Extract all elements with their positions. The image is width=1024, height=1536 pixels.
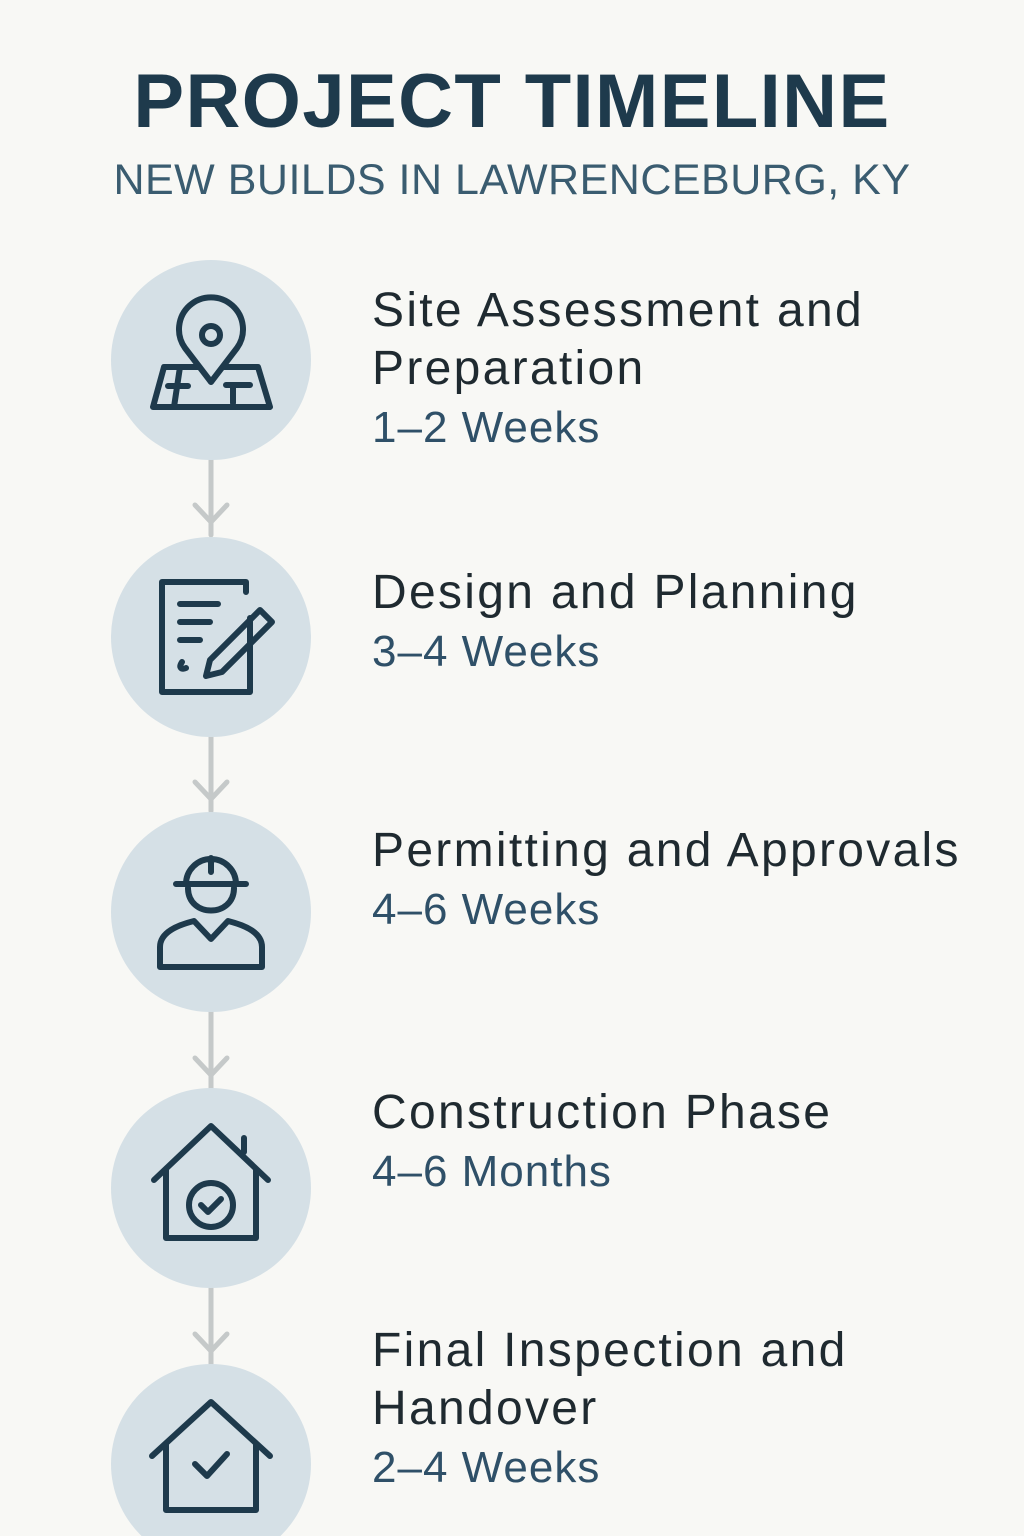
icon: map pin	[153, 297, 270, 407]
icon: house check 1	[154, 1126, 268, 1238]
step 4: Construction Phase	[372, 1086, 832, 1139]
icon: document pencil	[162, 582, 272, 692]
step 4: 4–6 Months	[372, 1147, 612, 1196]
step 1: Preparation	[372, 342, 645, 395]
step 3: Permitting and Approvals	[372, 824, 961, 877]
icon: worker	[160, 858, 262, 967]
step 5: Handover	[372, 1382, 599, 1435]
step 5: 2–4 Weeks	[372, 1443, 600, 1492]
step 5	[372, 1324, 848, 1492]
arrows	[195, 460, 227, 1364]
step 4	[372, 1086, 832, 1196]
step 3: 4–6 Weeks	[372, 885, 600, 934]
subtitle: NEW BUILDS IN LAWRENCEBURG, KY	[113, 156, 911, 204]
step 2: Design and Planning	[372, 566, 859, 619]
step 2	[372, 566, 859, 676]
step 1: 1–2 Weeks	[372, 403, 600, 452]
title: PROJECT TIMELINE	[133, 59, 891, 144]
step 5: Final Inspection and	[372, 1324, 848, 1377]
step 1: Site Assessment and	[372, 284, 864, 337]
step 3	[372, 824, 961, 934]
step 2: 3–4 Weeks	[372, 627, 600, 676]
step 1	[372, 284, 864, 452]
icon: house check 2	[152, 1402, 270, 1510]
circles	[111, 260, 311, 1536]
